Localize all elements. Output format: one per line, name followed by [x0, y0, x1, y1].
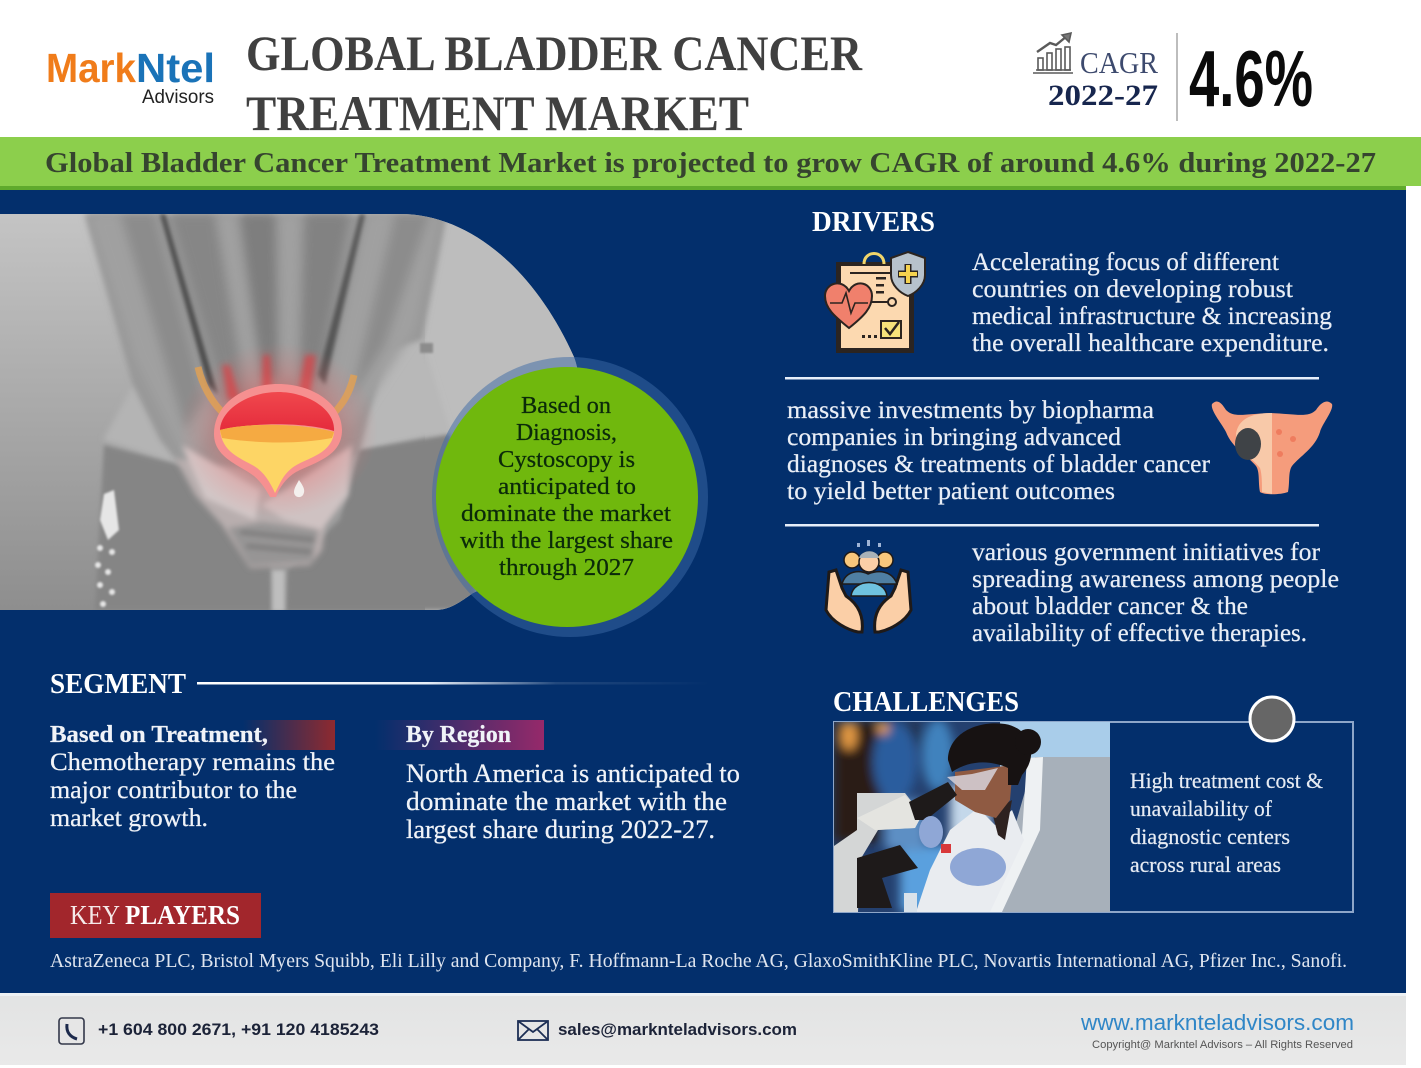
CAGR badge: [1033, 33, 1313, 123]
title: [246, 25, 863, 141]
challenge text: diagnostic centers: [1130, 824, 1290, 849]
treatment text: market growth.: [50, 805, 208, 832]
treatment text: Based on Treatment,: [50, 722, 268, 748]
driver text 3: various government initiatives for: [972, 539, 1321, 566]
challenge text: [1130, 768, 1323, 877]
callout: diagnosis circle: [432, 357, 708, 637]
hair and face: [955, 765, 1013, 818]
driver text 1: countries on developing robust: [972, 276, 1293, 303]
icon: rising bar chart: [1033, 33, 1073, 73]
icon: phone: [59, 1018, 84, 1044]
green banner: Global Bladder Cancer Treatment Market is projected to grow CAGR of around 4.6% during 2022-27: [45, 148, 1376, 179]
driver text 1: [972, 249, 1333, 357]
CAGR badge: 4.6%: [1189, 34, 1313, 123]
driver text 2: [787, 397, 1211, 505]
treatment text: Chemotherapy remains the: [50, 749, 335, 776]
photo: scientist at microscope: [834, 719, 1110, 912]
title: GLOBAL BLADDER CANCER: [246, 25, 863, 81]
badge: key players: [50, 893, 261, 938]
treatment text: major contributor to the: [50, 777, 297, 804]
callout: diagnosis circle: dominate the market: [461, 501, 671, 527]
header: logo: Ntel: [136, 45, 215, 91]
callout: diagnosis circle: anticipated to: [498, 474, 636, 500]
ripped denim patches: [95, 490, 119, 607]
panel: drivers: [785, 206, 1339, 647]
region text: [406, 722, 740, 844]
driver text 2: massive investments by biopharma: [787, 397, 1154, 424]
bladder: [198, 367, 354, 497]
driver text 2: diagnoses & treatments of bladder cancer: [787, 451, 1211, 478]
CAGR badge: 2022-27: [1048, 79, 1158, 112]
driver text 2: to yield better patient outcomes: [787, 478, 1115, 505]
challenge text: across rural areas: [1130, 852, 1281, 877]
jeans: [95, 434, 478, 612]
icon: medical clipboard with heart and shield: [825, 252, 925, 353]
region text: By Region: [406, 722, 511, 748]
region text: largest share during 2022-27.: [406, 815, 715, 844]
header: logo: Mark: [46, 45, 136, 91]
treatment text: [50, 722, 335, 832]
green banner: [0, 137, 1421, 190]
title: TREATMENT MARKET: [246, 85, 749, 141]
driver text 2: companies in bringing advanced: [787, 424, 1122, 451]
header: logo: Advisors: [142, 87, 214, 108]
marker dot: [1250, 697, 1294, 741]
region text: North America is anticipated to: [406, 759, 740, 788]
driver text 3: about bladder cancer & the: [972, 593, 1248, 620]
panel: segment: [50, 668, 740, 844]
heading: segment: SEGMENT: [50, 668, 186, 700]
challenge text: High treatment cost &: [1130, 768, 1323, 793]
shirt and arms: [85, 214, 450, 470]
company list: AstraZeneca PLC, Bristol Myers Squibb, Eli Lilly and Company, F. Hoffmann-La Roche AG, GlaxoSmithKline PLC, Novartis International AG, Pfizer Inc., Sanofi.: [50, 950, 1347, 972]
region text: dominate the market with the: [406, 787, 727, 816]
lab partition: [990, 757, 1110, 912]
coat: [916, 808, 1024, 912]
driver text 3: [972, 539, 1339, 647]
microscope: [834, 793, 922, 912]
callout: diagnosis circle: Cystoscopy is: [498, 447, 635, 473]
photo: person with highlighted bladder: [0, 214, 600, 612]
driver text 3: spreading awareness among people: [972, 566, 1339, 593]
CAGR badge: CAGR: [1080, 45, 1158, 80]
driver text 3: availability of effective therapies.: [972, 620, 1307, 647]
challenge text: unavailability of: [1130, 796, 1273, 821]
website: www.marknteladvisors.com: [1080, 1010, 1354, 1035]
badge: key players: KEY: [70, 900, 120, 930]
driver text 1: medical infrastructure & increasing: [972, 303, 1333, 330]
copyright: Copyright@ Markntel Advisors – All Rights Reserved: [1092, 1039, 1353, 1051]
driver text 1: Accelerating focus of different: [972, 249, 1279, 276]
badge: key players: PLAYERS: [125, 900, 240, 930]
icon: bladder with tumour: [1212, 402, 1332, 494]
callout: diagnosis circle: Based on: [521, 393, 611, 419]
header: logo: [46, 45, 215, 108]
heading: challenges: CHALLENGES: [833, 686, 1019, 718]
email: sales@marknteladvisors.com: [558, 1021, 797, 1039]
callout: diagnosis circle: through 2027: [499, 555, 634, 581]
gloves: [919, 816, 943, 848]
phone numbers: +1 604 800 2671, +91 120 4185243: [98, 1021, 379, 1039]
icon: envelope: [518, 1021, 548, 1040]
footer: [0, 993, 1406, 1065]
red glow: [192, 351, 364, 506]
callout: diagnosis circle: with the largest share: [460, 528, 673, 554]
heading: drivers: DRIVERS: [812, 206, 935, 238]
icon: hands holding people: [826, 540, 911, 632]
driver text 1: the overall healthcare expenditure.: [972, 330, 1329, 357]
navy main panel: [0, 190, 1406, 993]
hands: [175, 445, 352, 568]
key players: [50, 893, 1347, 972]
callout: diagnosis circle: Diagnosis,: [516, 420, 617, 446]
panel: challenges: [833, 686, 1353, 912]
